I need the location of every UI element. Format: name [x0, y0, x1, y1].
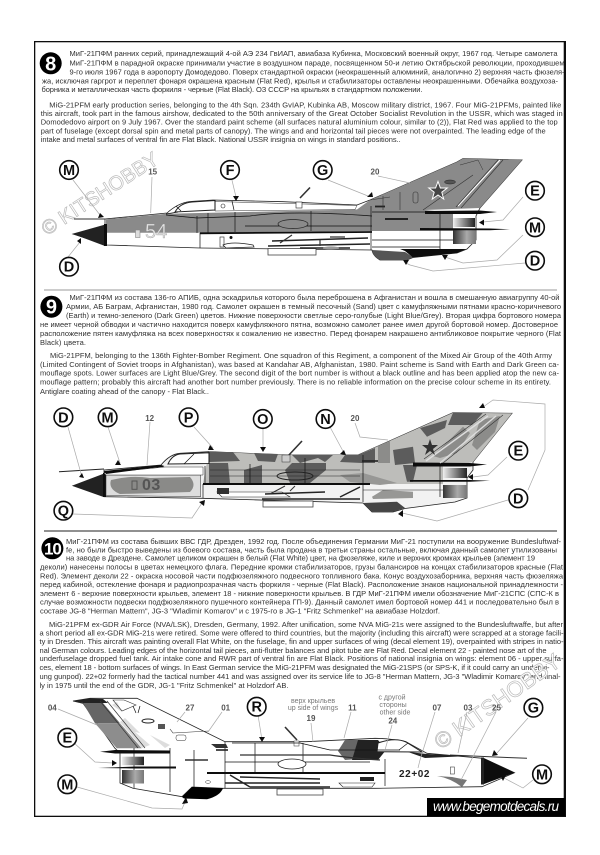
callout leaders 9: [68, 400, 545, 521]
label M: M: [61, 777, 73, 793]
note: other side: с другой: [378, 694, 406, 702]
text block: English description 10: ly in 1975 until the end of the GDR, JG-1 "Fritz Schmenkel" at Holzdorf AB.: [40, 681, 288, 690]
text block: Russian description 8: борника и металлическая часть форкиля - черные (Flat Black). ОЗ СССР на крыльях в стандартном положении.: [42, 85, 422, 94]
text block: Russian description 10: [40, 537, 564, 616]
label M: M: [529, 220, 541, 236]
text block: Russian description 8: МиГ-21ПФМ ранних серий, принадлежащий 4-ой АЭ 234 ГвИАП, авиабаза Кубинка, Московский военный округ, 1967 год. Четыре самолета: [70, 49, 558, 58]
text block: English description 8: Domodedovo airport on 9 July 1967. Over the standard paint scheme (all surfaces natural aluminium colour, similar to (2)), Flat Red was applied to the top: [41, 118, 558, 126]
side number 54: 54: [145, 221, 167, 243]
label Q: [54, 501, 73, 520]
label D: [54, 408, 73, 427]
label D: [509, 489, 528, 508]
panel: aircraft 10: [40, 537, 566, 816]
text block: Russian description 10: деколи) нанесены полосы в цветах немецкого флага. Передние кромки стабилизаторов, грузы балансиров на концах стабилизаторов красные (Flat: [40, 562, 564, 572]
label D: D: [64, 260, 74, 276]
decal number 20: 20: [351, 414, 360, 423]
text block: Russian description 10: случае возможности подвески подфюзеляжного пушечного контейнера ГП-9). Данный самолет имел бортовой номер 441 и последовательно был в: [40, 598, 559, 606]
text block: Russian description 10: составе JG-8 "Herman Mattern", JG-3 "Wladimir Komarov" и с 1975-го в JG-1 "Fritz Schmenkel" на авиабазе Holzdorf.: [40, 606, 440, 616]
panel: aircraft 9: [40, 293, 562, 521]
callout leaders 10: [58, 709, 533, 809]
decal numbers: 03: [464, 704, 473, 712]
insignia: red star: [429, 182, 447, 199]
text block: Russian description 10: перед кабиной, остекление фонаря и радиопрозрачная часть форкиля - черные (Flat Black). Расположение знаков национальной принадлежности -: [40, 580, 564, 589]
badge: number 10: [41, 537, 63, 559]
text block: Russian description 8: 9-го июля 1967 года в аэропорту Домодедово. Поверх стандартной окраски (неокрашенный алюминий, аналогично 2) верхняя часть фюзеля-: [70, 68, 565, 76]
text block: English description 9: [40, 351, 560, 396]
label R: [247, 697, 266, 716]
note: other side: other side: [380, 710, 410, 716]
text block: English description 10: a short period all ex-GDR MiG-21s were retired. Some were offered to third countries, but the majority (including this aircraft) were scrapped at a storage facili-: [40, 628, 564, 638]
nose art: [437, 776, 467, 787]
text block: English description 8: [41, 100, 563, 144]
decal numbers: 01: [221, 704, 231, 712]
decal number 12: 12: [145, 414, 155, 423]
label M: [533, 765, 551, 784]
note: up side of wings: [288, 698, 339, 712]
text block: English description 9: mouflage spots. Lower surfaces are Light Blue/Grey. The second digit of the bort number is without a black outline and has been applied atop the new ca-: [40, 368, 560, 378]
label M: [98, 408, 117, 427]
label D: [60, 257, 78, 276]
label N: [316, 410, 335, 428]
label E: E: [62, 731, 72, 747]
label P: [179, 408, 198, 427]
text block: Russian description 10: элемент 6 - верхние поверхности крыльев, элемент 18 - нижние поверхности крыльев. В ГДР МиГ-21ПФМ имели обозначение МиГ-21СПС (СПС-К в: [40, 589, 559, 598]
label F: F: [226, 163, 235, 179]
decal number 20: 20: [371, 168, 380, 176]
note: other side: стороны: [379, 702, 407, 709]
label E: [58, 728, 77, 747]
label D: D: [58, 410, 69, 426]
decal numbers: 07: [433, 704, 442, 712]
decal number 15: 15: [148, 168, 158, 176]
decal numbers: 27: [186, 704, 195, 712]
label O: [253, 410, 272, 428]
note: other side: [378, 694, 410, 716]
text block: Russian description 10: Red). Элемент деколи 22 - окраска носовой части подфюзеляжного подвесного топливного бака. Конус воздухозаборника, верхняя часть фюзеляжа: [40, 572, 564, 580]
text block: Russian description 10: МиГ-21ПФМ из состава бывших ВВС ГДР, Дрезден, 1992 год. После объединения Германии МиГ-21 поступили на вооружение Bundesluftwaf-: [66, 537, 562, 546]
label Q: Q: [58, 504, 69, 520]
label G: [524, 698, 543, 717]
label R: R: [251, 700, 262, 716]
label E: E: [530, 184, 540, 200]
text block: English description 8: intake and metal surfaces of ventral fin are Flat Black. National USSR insignia on wings in standard positions..: [41, 135, 401, 144]
note: up side of wings: верх крыльев: [291, 698, 335, 705]
label E: E: [513, 444, 523, 460]
label G: [313, 161, 332, 179]
decal numbers: 25: [492, 704, 501, 712]
text block: Russian description 8: [42, 49, 565, 94]
aircraft side view 9: [59, 413, 512, 512]
decal numbers: 04: [48, 704, 57, 712]
tactical number 22+02: 22+02: [399, 769, 430, 780]
decal numbers: 11: [348, 704, 357, 712]
label E: [526, 181, 544, 200]
text block: English description 10: ung gunpod). 22+02 formerly had the tactical number 441 and was assigned over its service life to JG-8 "Herman Mattern, JG-3 "Wladimir Komarov" and final-: [40, 672, 561, 681]
badge: number 10: 10: [44, 539, 61, 558]
label M: [60, 161, 78, 179]
text block: English description 10: MiG-21PFM ex-GDR Air Force (NVA/LSK), Dresden, Germany, 1992. After unification, some NVA MiG-21s were assigned to the Bundesluftwaffe, but after: [49, 620, 564, 629]
text block: Russian description 9: не имеет черной обводки и частично находится поверх камуфляжного пятна, возможно самолет ранее имел другой бортовой номер. Достоверное: [40, 320, 558, 329]
watermark: © KITSHOBBY: [430, 648, 566, 754]
label M: [58, 775, 77, 794]
text block: Russian description 9: Армии, АБ Баграм, Афганистан, 1980 год. Самолет окрашен в темный песочный (Sand) цвет с камуфляжными пятнами красно-коричневого: [66, 302, 561, 311]
decal numbers: 24: [388, 716, 398, 726]
side number 03: 03: [142, 477, 161, 494]
text block: English description 10: nal German colours. Leading edges of the horizontal tail pieces, anti-flutter balances and pitot tube are Flat Red. Decal element 22 - painted nose art of the: [40, 646, 546, 655]
text block: Russian description 8: МиГ-21ПФМ в парадной окраске принимали участие в воздушном параде, посвященном 50-и летию Октябрьской революции, проходившем: [70, 58, 564, 68]
decal numbers: 19: [307, 714, 316, 723]
text block: Russian description 10: на заводе в Дрездене. Самолет целиком окрашен в белый (Flat White) цвет, на фюзеляже, киле и верхних кромках крыльев (элемент 19: [66, 554, 535, 562]
text block: Russian description 9: (Earth) и темно-зеленого (Dark Green) цветов. Нижние поверхности светлые серо-голубые (Light Blue/Grey). Вторая цифра бортового номера: [66, 311, 562, 320]
watermark: © KITSHOBBY: [38, 148, 163, 240]
decal numbers: [48, 704, 501, 726]
text block: Russian description 9: расположение пятен камуфляжа на всех поверхностях к сожалению не известно. Перед фонарем накрашено антибликовое покрытие черного (Flat: [40, 329, 562, 338]
text block: English description 10: ces, element 18 - bottom surfaces of wings. In East German service the MiG-21PFM was designated the MiG-21SPS (or SPS-K, if it could carry an underwi-: [40, 663, 550, 672]
label N: N: [320, 412, 331, 428]
label D: [526, 251, 544, 270]
callout leaders 8: [68, 176, 525, 271]
aircraft side view 10: [73, 698, 527, 799]
text block: English description 9: Antiglare coating ahead of the canopy - Flat Black..: [40, 387, 209, 396]
note: up side of wings: up side of wings: [288, 705, 339, 712]
text block: English description 9: mouflage pattern; probably this aircraft had another bort number previously. There is no reliable information on the precise colour scheme in its entirety.: [40, 378, 551, 386]
text block: English description 9: (Limited Contingent of Soviet troops in Afghanistan), was based at Kandahar AB, Afghanistan, 1980. Paint scheme is Sand with Earth and Dark Green ca-: [40, 360, 560, 369]
text block: English description 8: this aircraft, took part in the famous airshow, dedicated to the 50th anniversary of the Great October Socialist Revolution in the USSR, which was staged in: [41, 109, 563, 118]
label P: P: [184, 410, 194, 426]
text block: English description 9: MiG-21PFM, belonging to the 136th Fighter-Bomber Regiment. One squadron of this Regiment, a component of the Mixed Air Group of the 40th Army: [50, 351, 552, 360]
label M: M: [63, 163, 75, 179]
text block: Russian description 9: [40, 293, 562, 347]
panel: aircraft 8: [38, 49, 565, 276]
label G: G: [317, 163, 328, 179]
badge: number 8: 8: [45, 53, 56, 75]
badge: number 8: [40, 52, 62, 75]
text block: English description 8: part of fuselage (except dorsal spin and metal parts of canopy). The wings and and horizontal tail pieces were not overpainted. The leading edge of the: [41, 126, 546, 136]
text block: English description 10: underfuselage dropped fuel tank. Air intake cone and RWR part of ventral fin are Flat Black. Positions of national insignia on wings: element 06 - upper surfa-: [40, 654, 564, 663]
badge: number 9: [40, 296, 62, 319]
text block: Russian description 8: жа, исключая гаргрот и переплет фонаря окрашена красным (Flat Red), крылья и стабилизаторы оставлены неокрашенными. Обечайка воздухоза-: [42, 76, 558, 86]
text block: English description 8: MiG-21PFM early production series, belonging to the 4th Sqn. 234th GvIAP, Kubinka AB, Moscow military district, 1967. Four MiG-21PFMs, painted like: [49, 100, 561, 110]
side number 03: [132, 477, 161, 494]
label E: [509, 441, 528, 460]
badge: number 9: 9: [46, 297, 57, 319]
text block: Russian description 9: Black) цвета.: [40, 338, 86, 347]
aircraft side view 8: [73, 158, 522, 260]
label G: G: [528, 701, 539, 717]
label M: M: [102, 410, 114, 426]
label D: D: [513, 491, 524, 507]
text block: English description 10: [40, 620, 564, 690]
text block: English description 10: ty in Dresden. This aircraft was painting overall Flat White, on the fuselage, fin and upper surfaces of wing (decal element 19), overpainted with stripes in natio-: [40, 637, 564, 646]
text block: Russian description 10: fe, но были быстро выведены из боевого состава, часть была продана в третьи страны остальные, включая данный самолет утилизованы: [66, 546, 557, 554]
label O: O: [257, 412, 268, 428]
website footer: www.begemotdecals.ru: [433, 799, 559, 814]
text block: Russian description 9: МиГ-21ПФМ из состава 136-го АПИБ, одна эскадрилья которого была переброшена в Афганистан и вошла в смешанную авиагруппу 40-ой: [70, 293, 560, 302]
label D: D: [530, 254, 540, 270]
label M: M: [536, 767, 548, 783]
label F: [221, 161, 239, 179]
label M: [526, 218, 544, 237]
